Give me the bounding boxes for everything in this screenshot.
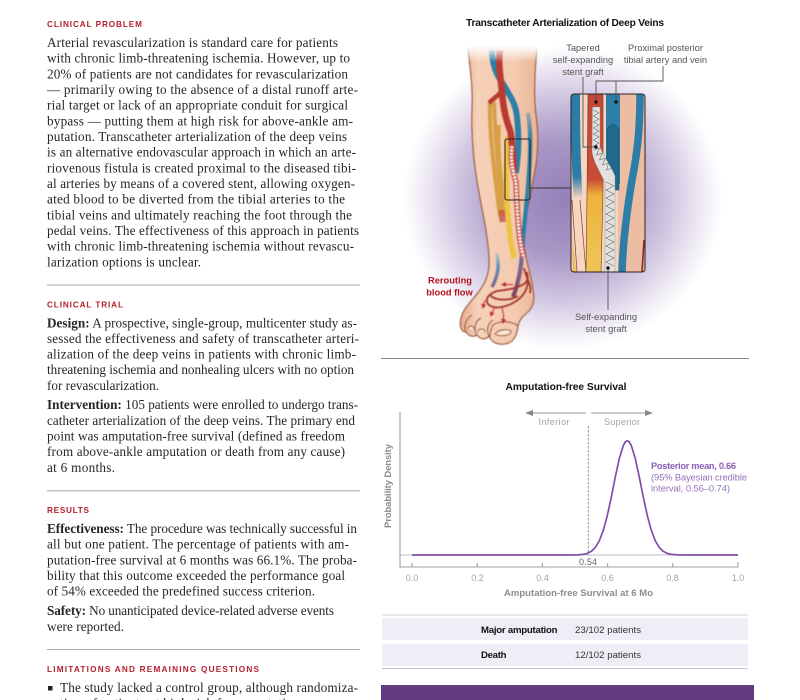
row: death: 12/102 patients: [575, 650, 641, 661]
stent in leg: [511, 146, 524, 258]
text block: intervention: from above-ankle amputation or death from any cause): [47, 444, 345, 459]
icon: bullet: [48, 686, 52, 690]
text block: clinical problem body: pedal veins. The effectiveness of this approach in patients: [47, 223, 359, 238]
x axis title: Amputation-free Survival at 6 Mo: [504, 588, 653, 599]
text block: clinical problem body: ated blood to be diverted from the tibial arteries to the: [47, 192, 345, 207]
y axis title: Probability Density: [383, 443, 394, 528]
purple glow background: [403, 46, 723, 350]
illustration: leg and foot: [460, 48, 538, 344]
yellow artery: [506, 136, 514, 258]
label: superior: Superior: [604, 417, 640, 427]
panel: limitations and remaining questions: [47, 665, 358, 700]
text block: clinical problem body: tibial veins and ultimately reaching the foot through the: [47, 207, 352, 222]
arrow: inferior: [525, 410, 586, 416]
text block: intervention: point was amputation-free survival (defined as freedom: [47, 428, 346, 444]
density curve: [412, 441, 738, 555]
annotation: posterior mean: (95% Bayesian credible: [651, 472, 747, 482]
text block: clinical problem body: 20% of patients are not candidates for revascularization: [47, 66, 348, 81]
medial vein: [492, 253, 498, 287]
text block: clinical problem body: al arteries by means of a covered stent, allowing oxygen-: [47, 176, 355, 191]
x axis tick labels: 0.8: [666, 573, 679, 583]
label: proximal posterior tibial artery and vein: Proximal posterior: [628, 43, 703, 53]
label: proximal posterior tibial artery and vein: [624, 43, 707, 65]
x axis tick labels: 0.6: [601, 573, 614, 583]
text block: design: [47, 316, 359, 393]
text block: clinical problem body: putation. Transcatheter arterialization of the deep veins: [47, 129, 347, 144]
text block: intervention: catheter arterialization of the deep veins. The primary end: [47, 413, 355, 428]
heading: clinical problem: CLINICAL PROBLEM: [47, 20, 142, 29]
text block: design: sessed the effectiveness and safety of transcatheter arteri-: [47, 331, 359, 346]
text block: effectiveness: of 54% exceeded the predefined success criterion.: [47, 584, 315, 599]
label: tapered stent graft: stent graft: [562, 67, 604, 77]
main vein: [492, 50, 518, 173]
heading: limitations: LIMITATIONS AND REMAINING QUESTIONS: [47, 665, 260, 674]
text block: intervention: at 6 months.: [47, 460, 115, 475]
label: rerouting blood flow: blood flow: [426, 288, 473, 298]
label: proximal posterior tibial artery and vein: tibial artery and vein: [624, 55, 707, 65]
text block: clinical problem body: bypass — putting them at high risk for above-ankle am-: [47, 113, 353, 128]
row: major amputation: [382, 618, 748, 640]
text block: effectiveness: Effectiveness: The procedure was technically successful in: [47, 521, 357, 536]
text block: clinical problem body: with chronic limb-threatening ischemia. However, up to: [47, 51, 350, 66]
stent graft: [592, 107, 615, 272]
leg top fade: [460, 44, 544, 62]
chart axes: [400, 412, 738, 567]
text block: clinical problem body: is an alternative endovascular approach in which an arte-: [47, 145, 356, 160]
x axis tick labels: 0.2: [471, 573, 484, 583]
foot veins: [487, 268, 530, 307]
panel: illustration: [403, 18, 723, 350]
label: tapered stent graft: Tapered: [566, 43, 600, 53]
row: death: Death: [481, 650, 507, 661]
icon: locator box on leg: [505, 139, 530, 200]
text block: safety: were reported.: [47, 619, 124, 634]
label: tapered stent graft: [553, 43, 613, 77]
annotation: posterior mean: [651, 461, 747, 494]
text block: design: for revascularization.: [47, 378, 159, 393]
x axis tick labels: 1.0: [732, 573, 744, 583]
panel: clinical trial: [47, 300, 359, 475]
red artery: [499, 50, 514, 170]
label: rerouting blood flow: [426, 276, 473, 298]
text block: clinical problem body: Arterial revascularization is standard care for patients: [47, 35, 338, 50]
text block: safety: [47, 603, 334, 634]
banner: conclusions: [381, 685, 754, 700]
leader lines and dots: [583, 66, 663, 310]
title: illustration: Transcatheter Arterialization of Deep Veins: [466, 18, 664, 29]
text block: limitation bullet: The study lacked a control group, although randomiza-: [60, 680, 358, 695]
text block: design: Design: A prospective, single-group, multicenter study as-: [47, 316, 357, 330]
row: major amputation: Major amputation: [481, 625, 558, 636]
heading: amputation-free survival: Amputation-free Survival: [506, 382, 627, 393]
panel: results: [47, 506, 357, 634]
text block: effectiveness: bility that this outcome exceeded the performance goal: [47, 568, 345, 583]
text block: clinical problem body: larization options is unclear.: [47, 254, 201, 269]
heading: results: RESULTS: [47, 506, 90, 515]
toe creases and nails: [465, 315, 518, 337]
label: self-expanding stent graft: stent graft: [585, 324, 627, 334]
text block: design: alization of the deep veins in patients with chronic limb-: [47, 346, 356, 362]
threshold dashed line: [587, 426, 589, 555]
tan diseased arteries: [490, 102, 505, 216]
panel: clinical problem: [46, 20, 359, 269]
text block: clinical problem body: with chronic limb-threatening ischemia without revascu-: [47, 239, 354, 254]
chart: posterior density: [383, 410, 747, 599]
table: outcomes: [382, 614, 748, 669]
label: rerouting blood flow: Rerouting: [428, 276, 472, 286]
text block: intervention: Intervention: 105 patients were enrolled to undergo trans-: [47, 397, 358, 412]
arrow: superior: [591, 410, 653, 416]
text block: clinical problem body: — primarily owing to the absence of a distal runoff arte-: [46, 82, 358, 97]
text block: safety: Safety: No unanticipated device-related adverse events: [47, 603, 334, 618]
heading: clinical trial: CLINICAL TRIAL: [47, 300, 123, 310]
x axis tick labels: 0.4: [536, 573, 549, 583]
x axis tick labels: [406, 573, 744, 583]
row: death: [382, 644, 748, 666]
label: self-expanding stent graft: Self-expanding: [575, 312, 637, 322]
connector line: [530, 187, 571, 189]
text block: clinical problem body: rial target or lack of an appropriate conduit for surgical: [47, 98, 348, 113]
label: self-expanding stent graft: [575, 312, 637, 334]
label: tapered stent graft: self-expanding: [553, 55, 613, 65]
label: inferior: Inferior: [538, 417, 570, 427]
annotation: posterior mean: Posterior mean, 0.66: [651, 461, 736, 471]
text block: design: threatening ischemia and nonhealing ulcers with no option: [47, 362, 354, 377]
text block: effectiveness: [47, 521, 357, 599]
lateral vein: [513, 113, 530, 297]
x axis tick labels: 0.0: [406, 573, 418, 583]
panel: amputation-free survival: [382, 382, 748, 669]
row: major amputation: 23/102 patients: [575, 625, 641, 636]
text block: clinical problem body: [46, 35, 359, 269]
rerouting arrows: [483, 284, 513, 322]
text block: effectiveness: putation-free survival at 6 months was 66.1%. The proba-: [47, 552, 357, 567]
inset: stent graft detail: [571, 94, 645, 272]
text block: clinical problem body: riovenous fistula is created proximal to the diseased tibi-: [47, 160, 356, 175]
threshold value: 0.54: [579, 557, 597, 567]
text block: intervention: [47, 397, 358, 475]
annotation: posterior mean: interval, 0.56–0.74): [651, 484, 730, 494]
text block: effectiveness: all but one patient. The percentage of patients with am-: [47, 537, 349, 552]
